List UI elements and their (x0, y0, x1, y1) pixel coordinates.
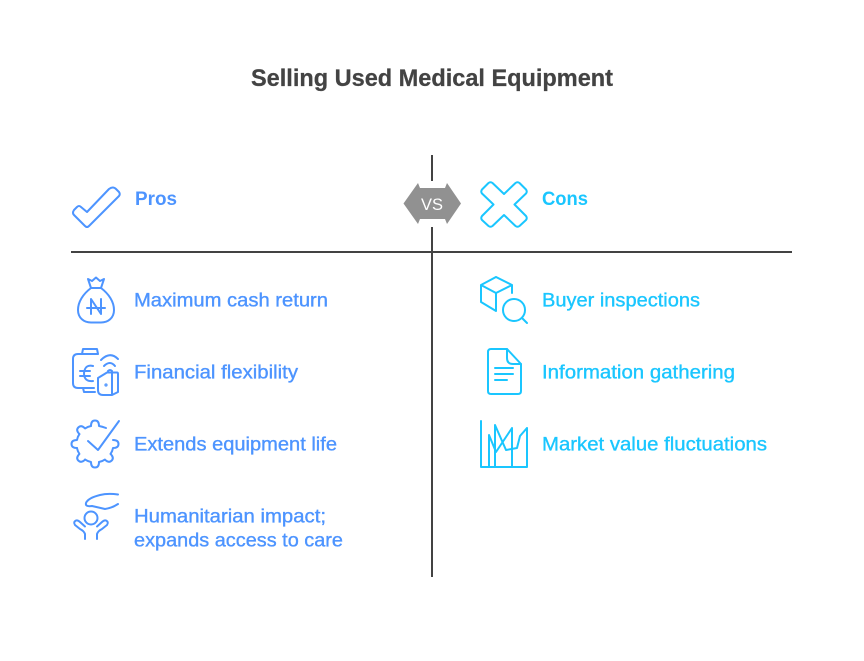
axis lines (71, 155, 792, 577)
label (134, 506, 343, 552)
icon: money bag (78, 278, 114, 322)
label: Humanitarian impact; (134, 506, 326, 528)
con item: market value fluctuations (481, 421, 767, 467)
label: Market value fluctuations (542, 434, 767, 456)
icon: cross (481, 182, 527, 227)
icon: gear with check (71, 420, 119, 468)
pro item: humanitarian impact (74, 494, 343, 552)
icon: document (488, 349, 521, 394)
icon: box with magnifier (481, 277, 527, 323)
label: Financial flexibility (134, 362, 299, 384)
cons header (481, 182, 588, 227)
label: Information gathering (542, 362, 735, 384)
pro item: financial flexibility (73, 349, 299, 395)
label: Maximum cash return (134, 290, 328, 312)
pro item: maximum cash return (78, 278, 328, 322)
icon: check mark (73, 188, 120, 227)
vs badge (404, 183, 461, 224)
con item: information gathering (488, 349, 735, 394)
label: Buyer inspections (542, 290, 700, 312)
label: expands access to care (134, 530, 343, 552)
vs badge: VS (421, 195, 443, 214)
icon: hand over person (74, 494, 118, 539)
con item: buyer inspections (481, 277, 700, 323)
pros heading: Pros (135, 188, 177, 210)
cons heading: Cons (542, 188, 588, 210)
pro item: extends equipment life (71, 420, 337, 468)
icon: watch with euro and wallet (73, 349, 118, 395)
icon: fluctuating chart (481, 421, 527, 467)
pros header (73, 188, 177, 227)
title: Selling Used Medical Equipment (251, 65, 613, 92)
label: Extends equipment life (134, 434, 337, 456)
